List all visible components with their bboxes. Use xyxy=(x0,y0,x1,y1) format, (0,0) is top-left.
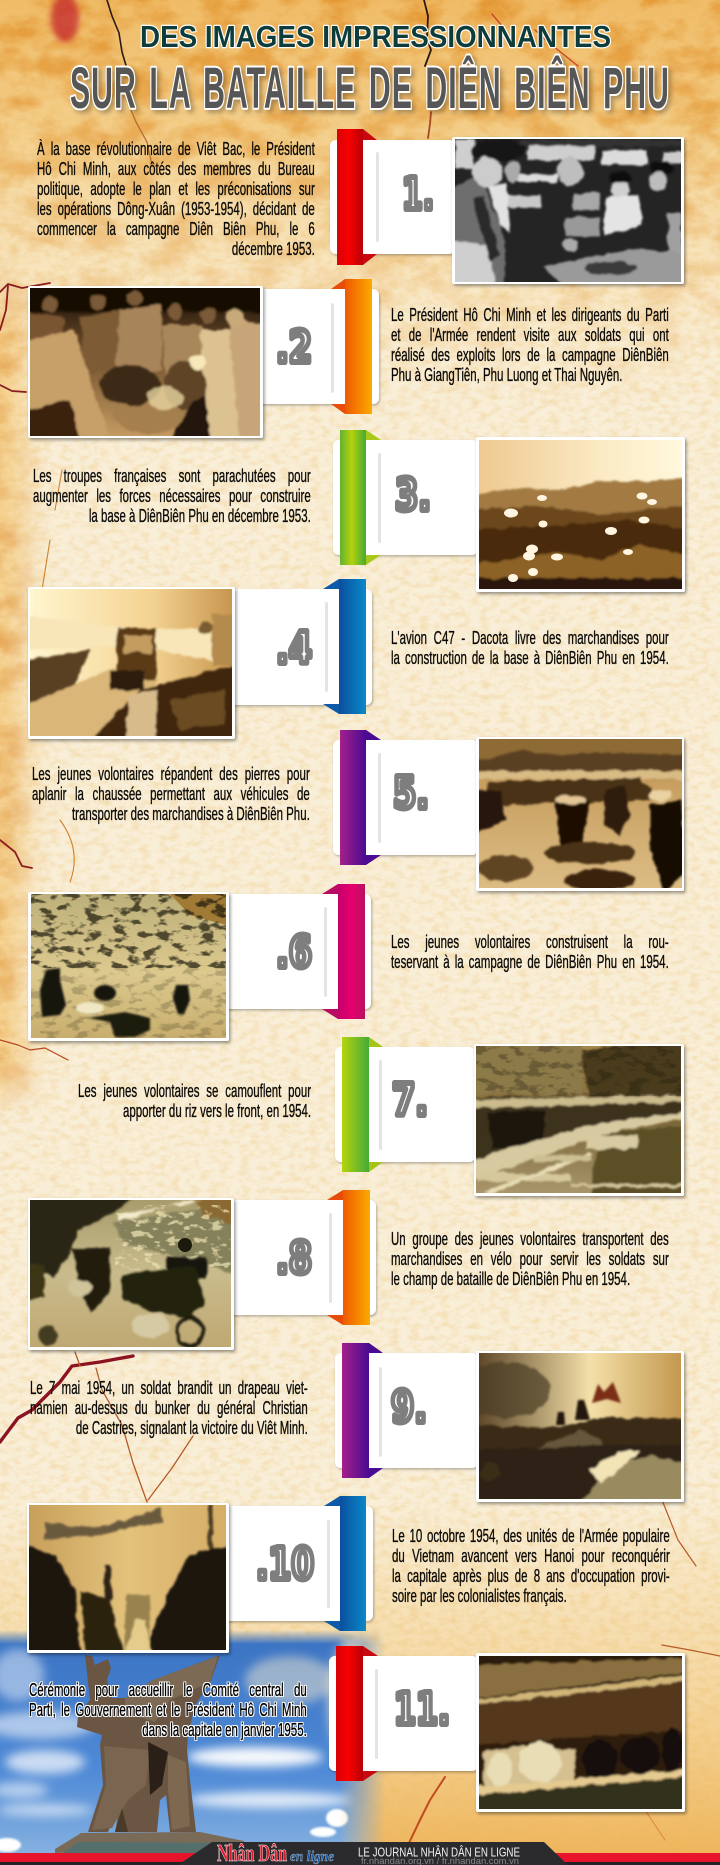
text: item 6: teservant à la campagne de DiênBiên Phu en 1954. xyxy=(391,951,669,972)
ribbon 1 xyxy=(337,129,377,265)
ribbon 7 xyxy=(342,1037,383,1172)
ribbon 6 xyxy=(322,884,365,1019)
card 6 xyxy=(222,894,371,1009)
text: item 3: augmenter les forces nécessaires pour construire xyxy=(33,485,311,506)
ribbon 3 xyxy=(340,430,381,565)
text: item 5: transporter des marchandises à DiênBiên Phu. xyxy=(72,803,310,824)
number 11: 11. xyxy=(394,1684,450,1735)
number 8: .8 xyxy=(276,1233,312,1284)
footer banner xyxy=(0,1841,720,1865)
text: item 5 xyxy=(32,764,312,826)
photo 6 xyxy=(28,892,229,1041)
photo 1 xyxy=(450,137,685,286)
photo 7 xyxy=(472,1044,686,1197)
number 7: 7. xyxy=(392,1075,428,1126)
card 3 xyxy=(333,440,478,555)
text: item 1: Hô Chi Minh, aux côtés des membres du Bureau xyxy=(37,158,315,179)
card 11 xyxy=(329,1656,478,1771)
photo 3 xyxy=(474,437,688,594)
text: item 11 (white outlined): Parti, le Gouvernement et le Président Hô Chi Minh xyxy=(29,1699,307,1720)
number 5: 5. xyxy=(393,768,429,819)
image: victory monument statue xyxy=(55,1655,244,1858)
text: item 1 xyxy=(37,139,317,261)
text: item 8: marchandises en vélo pour servir les soldats sur xyxy=(391,1248,669,1269)
text: item 10: du Vietnam avancent vers Hanoi pour reconquérir xyxy=(392,1545,670,1566)
text: item 2: réalisé des exploits lors de la campagne DiênBiên xyxy=(391,344,669,365)
text: item 10 xyxy=(392,1526,672,1608)
ribbon 9 xyxy=(342,1343,383,1478)
text: item 2: et de l'Armée rendent visite aux soldats qui ont xyxy=(391,324,669,345)
photo 11 xyxy=(474,1652,686,1813)
number 10: .10 xyxy=(256,1539,314,1590)
text: item 1: commencer la campagne Diên Biên Phu, le 6 xyxy=(37,218,315,239)
text: item 2 xyxy=(391,305,671,387)
footer dark plate xyxy=(178,1842,568,1865)
text: item 11 (white outlined) xyxy=(29,1680,309,1742)
text: item 4 xyxy=(391,628,671,670)
ribbon 5 xyxy=(340,730,381,865)
text: item 7 xyxy=(78,1081,311,1123)
photo 8 xyxy=(26,1196,235,1350)
panel: item 1 xyxy=(37,129,685,286)
heading line one: DES IMAGES IMPRESSIONNANTES xyxy=(140,19,611,54)
photo 9 xyxy=(460,1351,686,1503)
panel: item 7 xyxy=(78,1037,686,1197)
ribbon 2 xyxy=(331,279,372,414)
text: item 1: les opérations Dông-Xuân (1953-1954), décidant de xyxy=(37,198,315,219)
panel: item 6 xyxy=(28,884,669,1041)
footer site name: LE JOURNAL NHÂN DÂN EN LIGNE xyxy=(358,1844,520,1860)
text: item 2: Phu à GiangTiên, Phu Luong et Thai Nguyên. xyxy=(391,364,622,385)
text: item 4: la construction de la base à DiênBiên Phu en 1954. xyxy=(391,647,669,668)
text: item 3: la base à DiênBiên Phu en décembre 1953. xyxy=(89,505,311,526)
text: item 10: soire par les colonialistes français. xyxy=(392,1585,567,1606)
text: item 3 xyxy=(33,466,313,528)
number 1: 1. xyxy=(402,169,434,220)
ribbon 4 xyxy=(323,579,366,714)
panel: item 5 xyxy=(32,730,688,892)
number 3: 3. xyxy=(395,470,431,521)
panel: item 11 xyxy=(29,1646,686,1813)
text: item 8: le champ de bataille de DiênBiên Phu en 1954. xyxy=(391,1268,630,1289)
number 9: 9. xyxy=(391,1382,427,1433)
panel: item 4 xyxy=(26,579,671,740)
text: item 11 (white outlined): dans la capitale en janvier 1955. xyxy=(142,1719,307,1740)
text: item 9: namien au-dessus du bunker du général Christian xyxy=(30,1397,308,1418)
card 5 xyxy=(333,740,478,855)
ribbon 10 xyxy=(324,1496,366,1631)
photo 4 xyxy=(26,587,236,740)
footer red strips xyxy=(0,1853,720,1865)
panel: item 3 xyxy=(33,430,688,594)
number 4: .4 xyxy=(276,623,312,674)
title xyxy=(70,19,670,121)
ribbon 8 xyxy=(327,1190,370,1325)
photo 2 xyxy=(26,284,264,440)
card 2 xyxy=(255,289,379,404)
photo 10 xyxy=(25,1503,230,1654)
number 2: .2 xyxy=(276,322,312,373)
text: item 9 xyxy=(30,1378,310,1440)
card 1 xyxy=(330,140,455,254)
text: item 7: apporter du riz vers le front, en 1954. xyxy=(123,1100,311,1121)
panel: item 2 xyxy=(26,279,671,440)
text: item 1: politique, adopte le plan et les préconisations sur xyxy=(37,178,315,199)
photo 5 xyxy=(474,735,688,892)
background: blue sky with clouds xyxy=(0,1630,385,1865)
text: item 9: de Castries, signalant la victoire du Viêt Minh. xyxy=(76,1417,308,1438)
panel: item 9 xyxy=(30,1343,686,1503)
card 4 xyxy=(228,589,372,705)
number 6: .6 xyxy=(276,927,312,978)
card 10 xyxy=(222,1506,373,1621)
text: item 8 xyxy=(391,1229,671,1291)
text: item 6 xyxy=(391,932,669,974)
panel: item 8 xyxy=(26,1190,671,1350)
card 9 xyxy=(335,1353,478,1468)
card 7 xyxy=(335,1047,475,1162)
text: item 5: aplanir la chaussée permettant aux véhicules de xyxy=(32,783,310,804)
ribbon 11 xyxy=(336,1646,378,1781)
text: item 1: décembre 1953. xyxy=(232,238,315,259)
card 8 xyxy=(226,1200,376,1315)
text: item 10: la capitale après plus de 8 ans d'occupation provi- xyxy=(392,1565,670,1586)
logo: Nhan Dan en ligne: en ligne xyxy=(290,1849,334,1865)
panel: item 10 xyxy=(25,1496,672,1654)
